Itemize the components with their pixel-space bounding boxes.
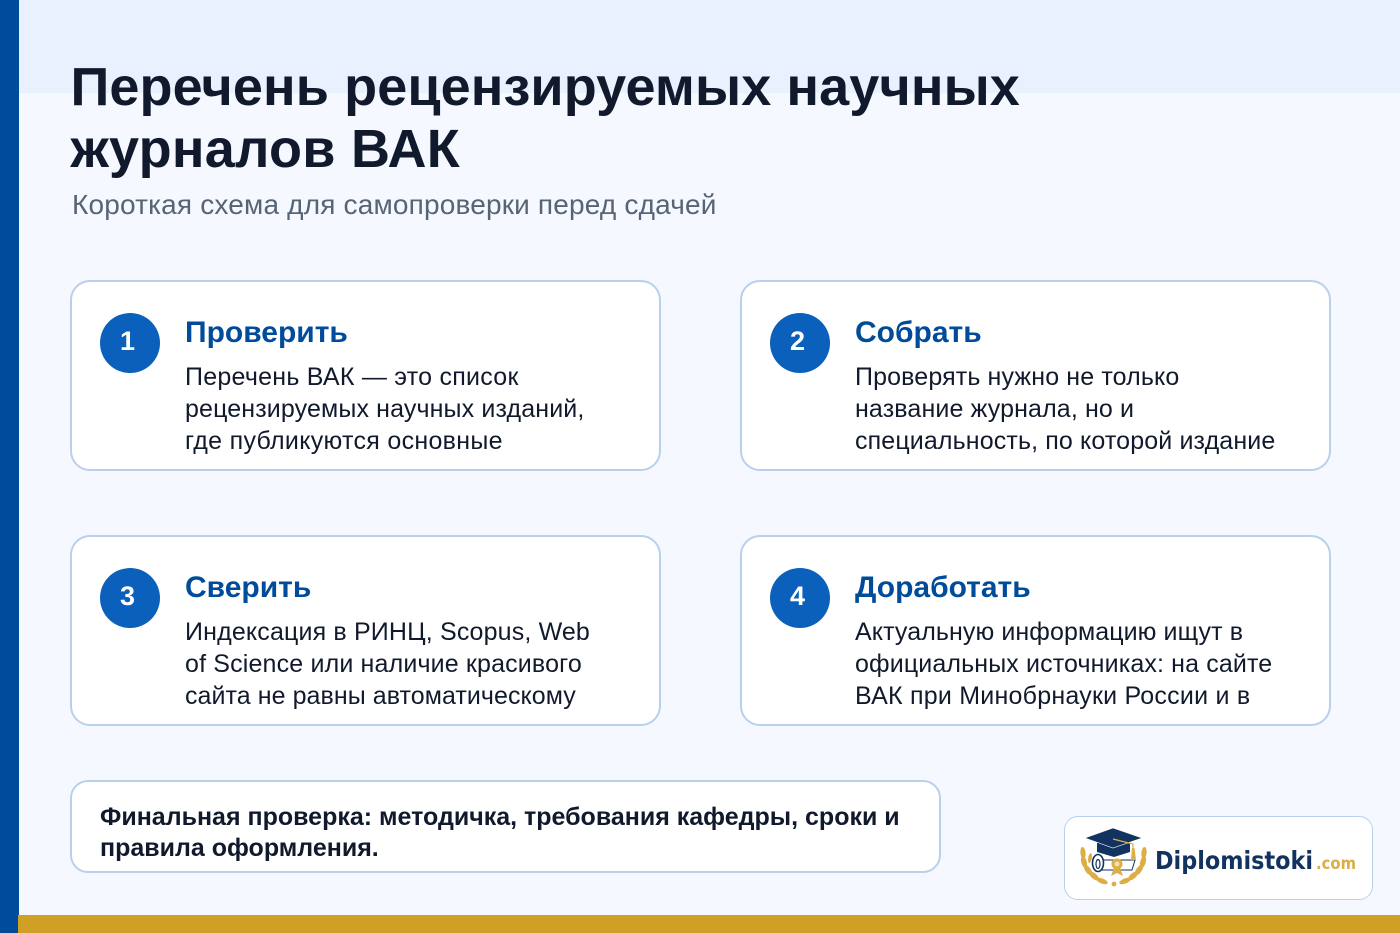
callout: final check: правила оформления. bbox=[100, 834, 379, 862]
left accent bar bbox=[0, 0, 19, 933]
step number 2: 2 bbox=[790, 326, 805, 356]
text: step 2: специальность, по которой издание bbox=[855, 427, 1275, 455]
header band bbox=[18, 0, 1400, 93]
text: step 2: Проверять нужно не только bbox=[855, 363, 1179, 391]
text: step 4: ВАК при Минобрнауки России и в bbox=[855, 682, 1250, 710]
text: step 4: Актуальную информацию ищут в bbox=[855, 618, 1243, 646]
text: step 1: рецензируемых научных изданий, bbox=[185, 395, 584, 423]
text: step 4: официальных источниках: на сайте bbox=[855, 650, 1272, 678]
heading: Сверить: Сверить bbox=[185, 571, 311, 604]
wordmark: Diplomistoki bbox=[1155, 846, 1313, 875]
text: step 3: of Science или наличие красивого bbox=[185, 650, 582, 678]
title bbox=[70, 57, 1020, 179]
icon: diploma scroll bbox=[1092, 854, 1135, 876]
step number 4 bbox=[770, 568, 830, 628]
icon: graduation cap bbox=[1085, 828, 1142, 860]
title: Перечень рецензируемых научных bbox=[70, 57, 1020, 117]
text: step 3 bbox=[185, 618, 590, 710]
panel: step 2 bbox=[740, 280, 1331, 471]
text: step 1 bbox=[185, 363, 584, 455]
step number 1: 1 bbox=[120, 326, 135, 356]
text: step 3: сайта не равны автоматическому bbox=[185, 682, 576, 710]
wordmark: .com bbox=[1316, 854, 1356, 874]
bottom accent bar bbox=[18, 915, 1400, 933]
text: step 2 bbox=[855, 363, 1275, 455]
step number 1 bbox=[100, 313, 160, 373]
text: step 1: где публикуются основные bbox=[185, 427, 503, 455]
heading: Доработать: Доработать bbox=[855, 571, 1031, 604]
step number 3 bbox=[100, 568, 160, 628]
step number 3: 3 bbox=[120, 581, 135, 611]
panel: step 1 bbox=[70, 280, 661, 471]
subtitle: Короткая схема для самопроверки перед сдачей bbox=[72, 189, 717, 220]
step number 4: 4 bbox=[790, 581, 805, 611]
heading: Проверить: Проверить bbox=[185, 316, 348, 349]
heading: Собрать: Собрать bbox=[855, 316, 982, 349]
panel: step 4 bbox=[740, 535, 1331, 726]
icon: laurel wreath bbox=[1080, 847, 1147, 886]
callout: final check bbox=[70, 780, 941, 873]
title: журналов ВАК bbox=[70, 119, 460, 179]
callout: final check: Финальная проверка: методичка, требования кафедры, сроки и bbox=[100, 803, 900, 831]
text: step 4 bbox=[855, 618, 1272, 710]
logo: Diplomistoki bbox=[1064, 816, 1373, 900]
step number 2 bbox=[770, 313, 830, 373]
text: step 2: название журнала, но и bbox=[855, 395, 1134, 423]
text: step 3: Индексация в РИНЦ, Scopus, Web bbox=[185, 618, 590, 646]
panel: step 3 bbox=[70, 535, 661, 726]
text: step 1: Перечень ВАК — это список bbox=[185, 363, 519, 391]
